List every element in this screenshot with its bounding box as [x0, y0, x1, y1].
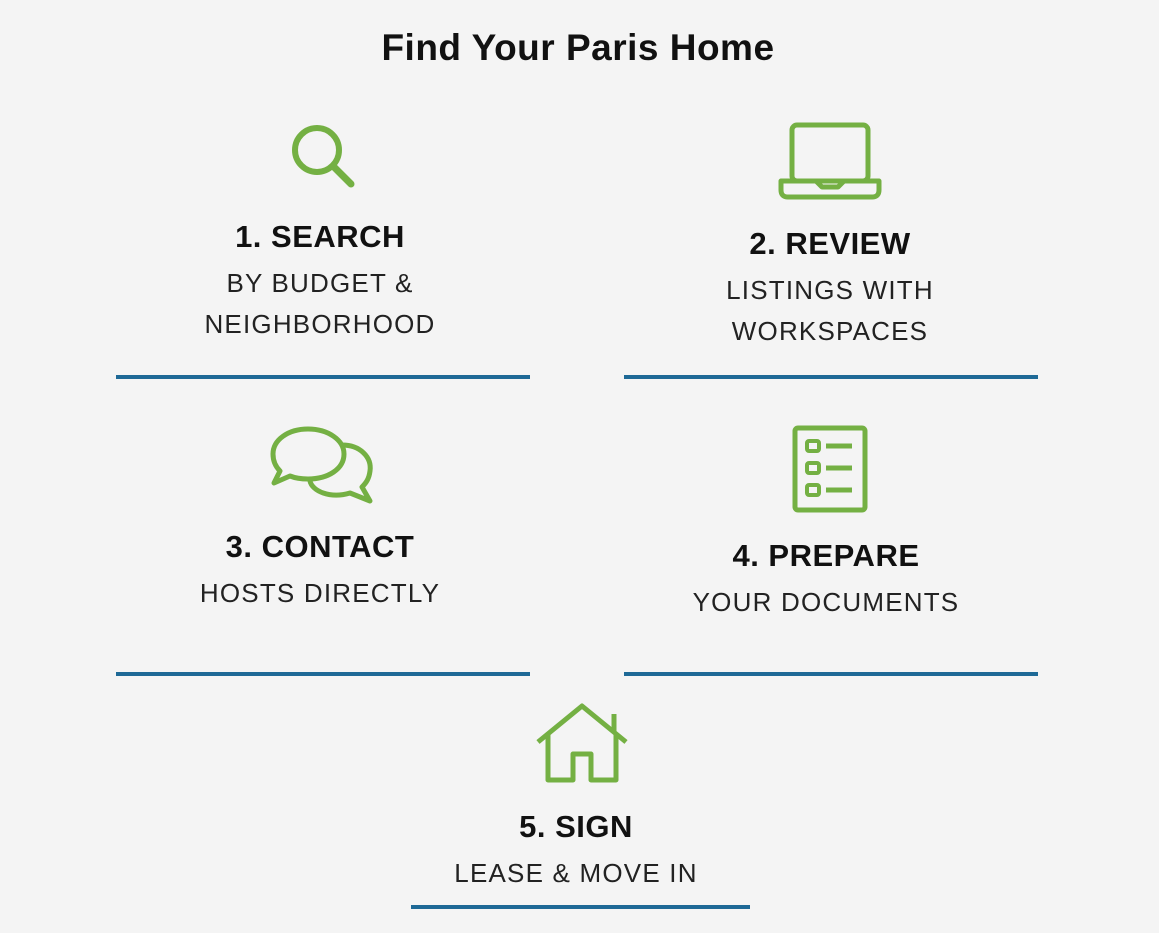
icon: magnifier: [292, 125, 354, 188]
heading 4: 4. PREPARE: [732, 538, 920, 573]
step 2: review: [726, 122, 934, 346]
subtitle 2: LISTINGS WITH: [726, 275, 934, 305]
step 4: prepare: [693, 426, 959, 617]
subtitle 1: NEIGHBORHOOD: [204, 309, 436, 339]
icon: house: [536, 703, 628, 782]
heading 3: 3. CONTACT: [226, 529, 414, 564]
icon: laptop: [778, 122, 882, 200]
subtitle 1: [204, 268, 436, 339]
step 3: contact: [200, 426, 440, 608]
icon: checklist: [792, 426, 868, 512]
subtitle 2: [726, 275, 934, 346]
title: Find Your Paris Home: [381, 27, 775, 68]
icon: chat bubbles: [270, 426, 373, 504]
subtitle 2: WORKSPACES: [732, 316, 928, 346]
subtitle 1: BY BUDGET &: [226, 268, 414, 298]
step 5: sign: [454, 703, 698, 888]
subtitle 3: HOSTS DIRECTLY: [200, 578, 440, 608]
heading 2: 2. REVIEW: [749, 226, 911, 261]
heading 1: 1. SEARCH: [235, 219, 405, 254]
subtitle 4: YOUR DOCUMENTS: [693, 587, 959, 617]
heading 5: 5. SIGN: [519, 809, 633, 844]
subtitle 5: LEASE & MOVE IN: [454, 858, 698, 888]
step 1: search: [204, 125, 436, 339]
